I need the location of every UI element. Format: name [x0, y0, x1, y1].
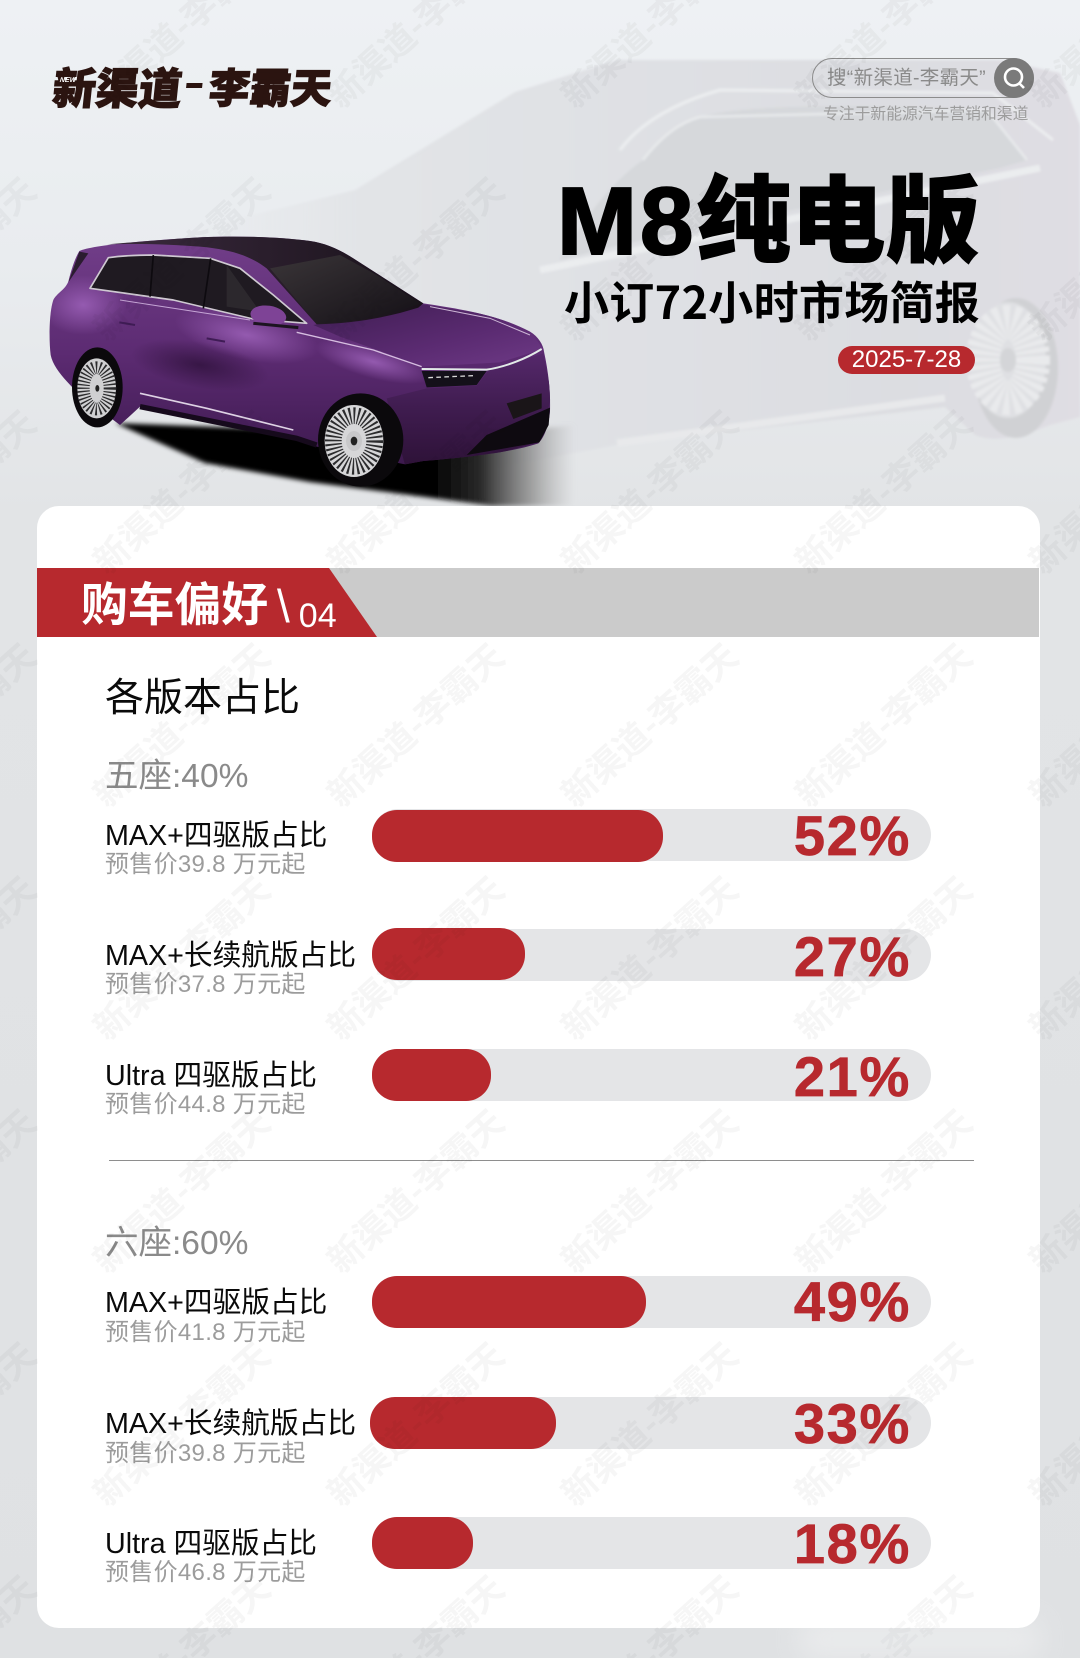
- section banner: [37, 568, 1039, 637]
- row: five-seat MAX+ long range: [105, 925, 931, 998]
- banner heading: 购车偏好: [81, 568, 268, 635]
- icon: magnifier: [994, 58, 1034, 98]
- row: six-seat Ultra AWD: 18%: [794, 1512, 911, 1575]
- slogan: 专注于新能源汽车营销和渠道: [823, 106, 1028, 123]
- light strip: [422, 349, 542, 370]
- icon: purple car: [50, 236, 550, 487]
- license plate: [507, 393, 542, 419]
- row: six-seat MAX+ long range: 33%: [794, 1392, 911, 1455]
- row: five-seat Ultra AWD: 预售价44.8 万元起: [105, 1091, 306, 1118]
- title: M8纯电版: [557, 145, 980, 282]
- logo: NEW: [59, 77, 77, 84]
- logo: 李霸天: [206, 55, 336, 115]
- row: six-seat Ultra AWD: [105, 1512, 931, 1586]
- row: six-seat MAX+ AWD: [105, 1270, 931, 1346]
- rear wheel: [72, 347, 123, 427]
- row: five-seat MAX+ AWD: 52%: [794, 804, 911, 867]
- divider: [109, 1160, 974, 1161]
- subtitle: 小订72小时市场简报: [564, 267, 980, 332]
- headlight: [422, 371, 487, 387]
- row: six-seat MAX+ AWD: 预售价41.8 万元起: [105, 1319, 306, 1346]
- row: five-seat MAX+ AWD: [105, 804, 931, 878]
- row: five-seat MAX+ long range: 27%: [794, 925, 911, 988]
- windshield: [270, 255, 420, 324]
- section banner red tab: [37, 568, 377, 637]
- front bumper: [387, 353, 552, 465]
- car shadow: [114, 420, 568, 506]
- row: five-seat Ultra AWD: [105, 1045, 931, 1118]
- five-seat label: 五座:40%: [105, 758, 248, 795]
- row: five-seat Ultra AWD: 21%: [794, 1045, 911, 1108]
- row: five-seat Ultra AWD: Ultra 四驱版占比: [105, 1060, 317, 1092]
- roof: [107, 237, 423, 324]
- front wheel: [318, 393, 403, 487]
- row: six-seat MAX+ long range: [105, 1392, 931, 1467]
- panel: purchase preference card: [37, 506, 1040, 1628]
- hood: [313, 304, 543, 367]
- grille: [467, 408, 550, 455]
- date badge: 2025-7-28: [852, 346, 961, 373]
- bottom right light blur: [800, 1620, 1040, 1658]
- search pill: [812, 58, 1034, 98]
- rear window pillar: [68, 252, 88, 282]
- wing mirror: [249, 303, 288, 328]
- door handles: [119, 322, 225, 342]
- side windows: [90, 255, 307, 323]
- hood and waist highlights: [430, 307, 530, 335]
- row: five-seat MAX+ long range: MAX+长续航版占比: [105, 940, 356, 972]
- row: six-seat MAX+ AWD: 49%: [794, 1270, 911, 1333]
- row: six-seat Ultra AWD: 预售价46.8 万元起: [105, 1559, 306, 1586]
- logo: [50, 55, 336, 117]
- row: five-seat MAX+ AWD: 预售价39.8 万元起: [105, 851, 306, 878]
- row: six-seat MAX+ AWD: MAX+四驱版占比: [105, 1287, 327, 1319]
- search pill: 搜“新渠道-李霸天”: [827, 67, 986, 89]
- six-seat label: 六座:60%: [105, 1225, 248, 1262]
- background ghost car: [338, 60, 1080, 438]
- side sill chrome: [140, 393, 293, 430]
- car body: [50, 236, 550, 464]
- row: six-seat MAX+ long range: 预售价39.8 万元起: [105, 1440, 306, 1467]
- logo: 新渠道: [50, 55, 186, 117]
- row: six-seat Ultra AWD: Ultra 四驱版占比: [105, 1528, 317, 1560]
- row: five-seat MAX+ long range: 预售价37.8 万元起: [105, 971, 306, 998]
- chart heading: 各版本占比: [105, 677, 300, 720]
- row: six-seat MAX+ long range: MAX+长续航版占比: [105, 1408, 356, 1440]
- banner number: \ 04: [277, 580, 337, 635]
- row: five-seat MAX+ AWD: MAX+四驱版占比: [105, 820, 327, 852]
